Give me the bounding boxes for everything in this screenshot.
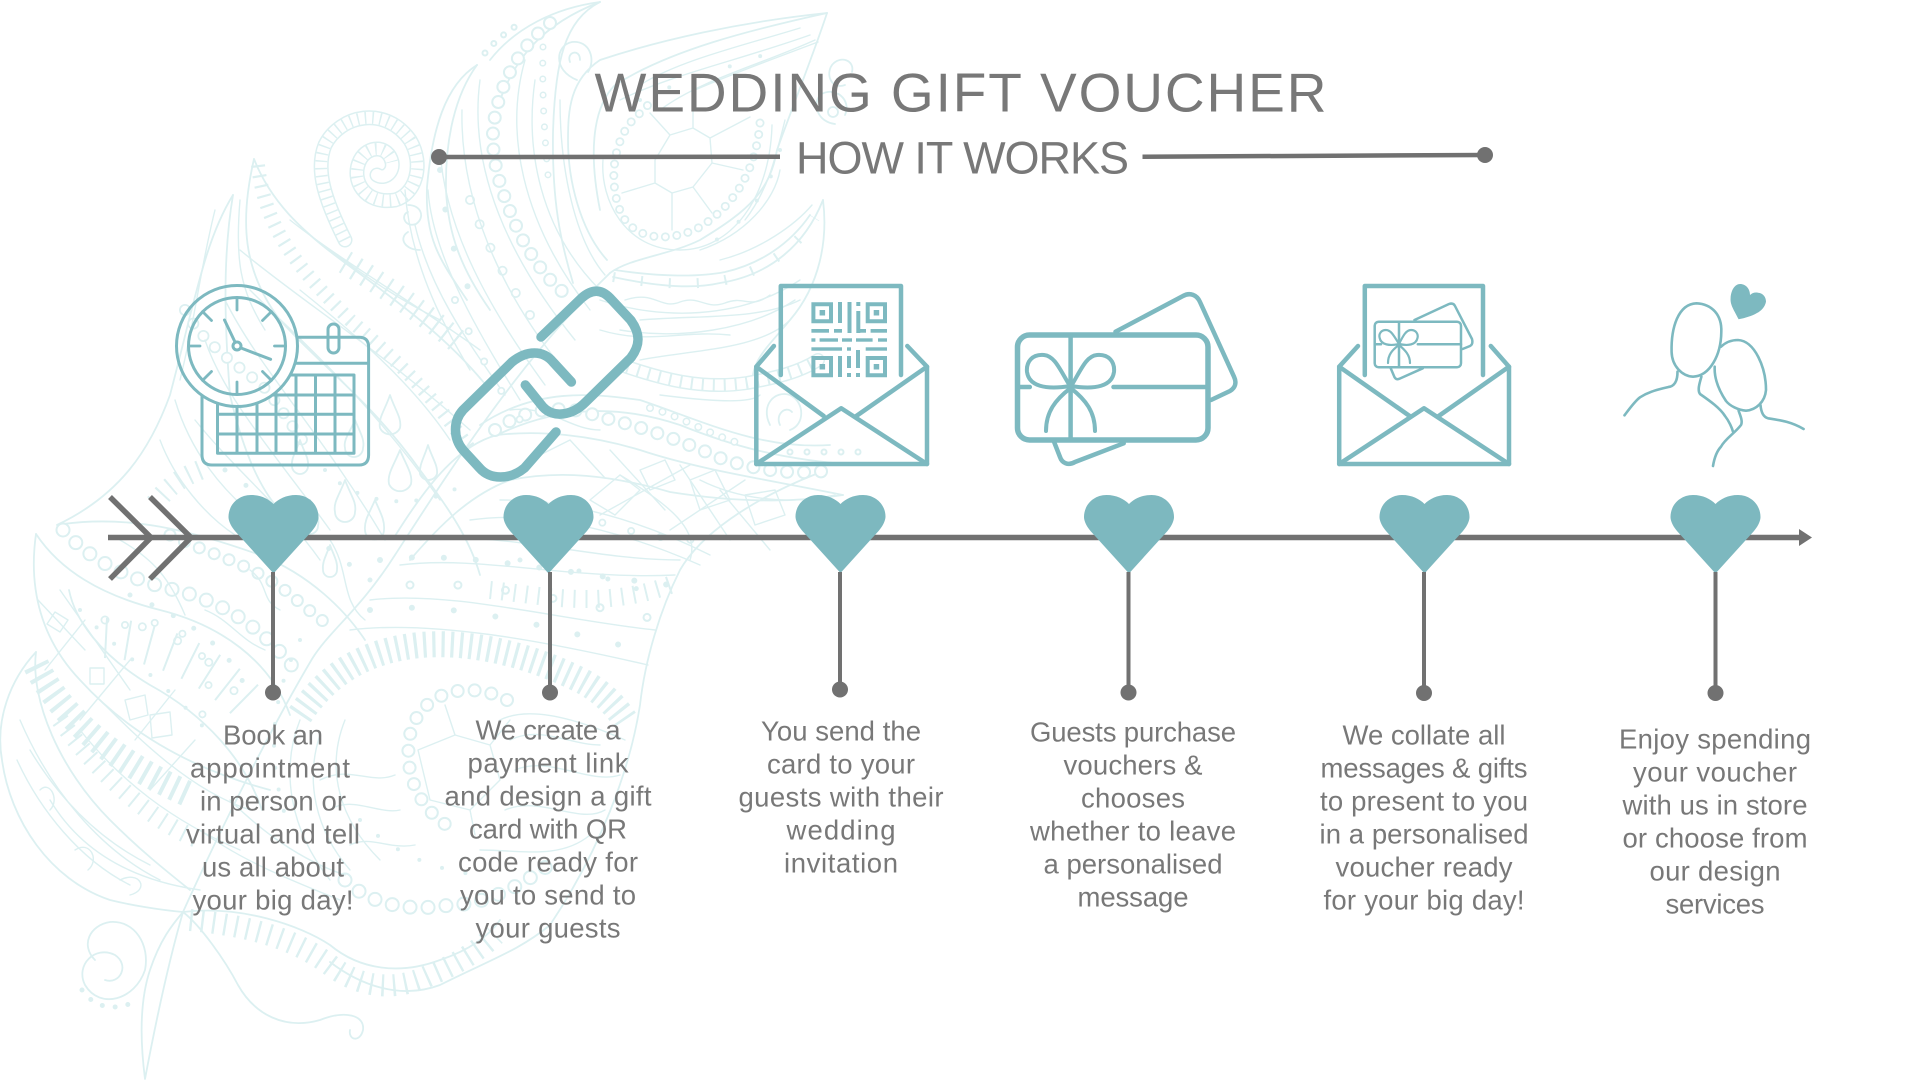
timeline arrow — [108, 497, 1812, 579]
step 4 text: message — [1078, 882, 1188, 913]
step 2 text: your guests — [476, 912, 620, 943]
step 3 text: wedding — [786, 815, 896, 846]
step 6 text — [1619, 723, 1811, 919]
step 1 text: virtual and tell — [186, 818, 360, 849]
step 3 text: guests with their — [738, 782, 944, 813]
step 3 text: You send the — [761, 716, 921, 747]
step 5 text: in a personalised — [1320, 818, 1528, 849]
step 2: payment link — [444, 291, 652, 943]
step 3 text — [738, 716, 944, 879]
feather: outer outlines — [0, 2, 858, 1079]
step 6: enjoy spending — [1619, 284, 1811, 919]
step 3 text: card to your — [767, 749, 915, 780]
step 4 text: vouchers & — [1064, 750, 1202, 781]
background: decorative feather — [0, 2, 860, 1079]
heart marker — [1670, 495, 1760, 574]
step 4 text — [1029, 717, 1236, 913]
icon: couple with heart — [1624, 284, 1804, 466]
step 2 text: We create a — [476, 714, 621, 745]
step 3 text: invitation — [784, 848, 898, 879]
step 2 text — [444, 714, 652, 943]
icon: chain link — [456, 291, 638, 477]
step 3: send the card — [738, 286, 944, 879]
step 4 text: Guests purchase — [1030, 717, 1236, 748]
step 5 text — [1320, 719, 1528, 915]
step 1 text — [186, 719, 360, 915]
step 6 text: your voucher — [1633, 756, 1797, 787]
step 2 text: code ready for — [458, 846, 638, 877]
heart marker — [228, 495, 318, 574]
step 5 text: to present to you — [1320, 785, 1528, 816]
connector stem with dot — [832, 572, 848, 698]
step 1 text: us all about — [202, 851, 344, 882]
step 1 text: your big day! — [192, 884, 354, 915]
feather: extra flowing strands — [20, 60, 835, 900]
connector stem with dot — [542, 572, 558, 700]
subtitle with divider lines — [431, 132, 1493, 183]
heart marker — [796, 495, 886, 573]
heart marker — [504, 495, 594, 574]
feather: rope bands and spirals — [82, 42, 860, 1007]
step 6 text: services — [1666, 888, 1764, 919]
subtitle text: HOW IT WORKS — [796, 132, 1129, 183]
step 2 text: you to send to — [460, 879, 636, 910]
subtitle left rule — [431, 149, 780, 165]
step 2 text: and design a gift — [444, 780, 652, 811]
step 2 text: payment link — [468, 747, 629, 778]
step 5 text: messages & gifts — [1320, 752, 1528, 783]
step 2 text: card with QR — [469, 813, 627, 844]
icon: envelope with QR code — [756, 286, 927, 464]
connector stem with dot — [1120, 572, 1136, 700]
step 6 text: our design — [1650, 855, 1780, 886]
title: WEDDING GIFT VOUCHER — [594, 62, 1326, 124]
step 5 text: for your big day! — [1324, 884, 1524, 915]
step 1 text: Book an — [223, 719, 323, 750]
connector stem with dot — [1708, 572, 1724, 701]
step 1 text: in person or — [200, 785, 346, 816]
heart marker — [1084, 495, 1174, 574]
heart marker — [1380, 495, 1470, 574]
feather: teardrops — [292, 395, 437, 577]
step 5: collate messages and gifts — [1320, 286, 1528, 915]
connector stem with dot — [265, 572, 281, 700]
icon: gift cards — [1018, 294, 1235, 464]
step 4 text: chooses — [1081, 783, 1185, 814]
step 4 text: a personalised — [1044, 849, 1222, 880]
step 6 text: with us in store — [1622, 789, 1808, 820]
step 4 text: whether to leave — [1029, 816, 1236, 847]
step 1 text: appointment — [190, 752, 350, 783]
step 6 text: or choose from — [1622, 822, 1808, 853]
icon: clock and calendar — [176, 286, 369, 465]
step 6 text: Enjoy spending — [1619, 723, 1811, 754]
QR code — [811, 302, 887, 377]
step 5 text: We collate all — [1342, 719, 1506, 750]
feather: bead chains — [63, 22, 832, 908]
feather: comb and zigzag bands — [17, 165, 785, 985]
step 4: guests purchase vouchers — [1018, 294, 1236, 913]
subtitle right rule — [1142, 147, 1493, 163]
icon: envelope with gift card — [1339, 286, 1509, 464]
step 5 text: voucher ready — [1336, 851, 1513, 882]
connector stem with dot — [1416, 572, 1432, 701]
step 1: book an appointment — [176, 286, 369, 915]
feather: eye and cell pattern — [510, 28, 818, 430]
